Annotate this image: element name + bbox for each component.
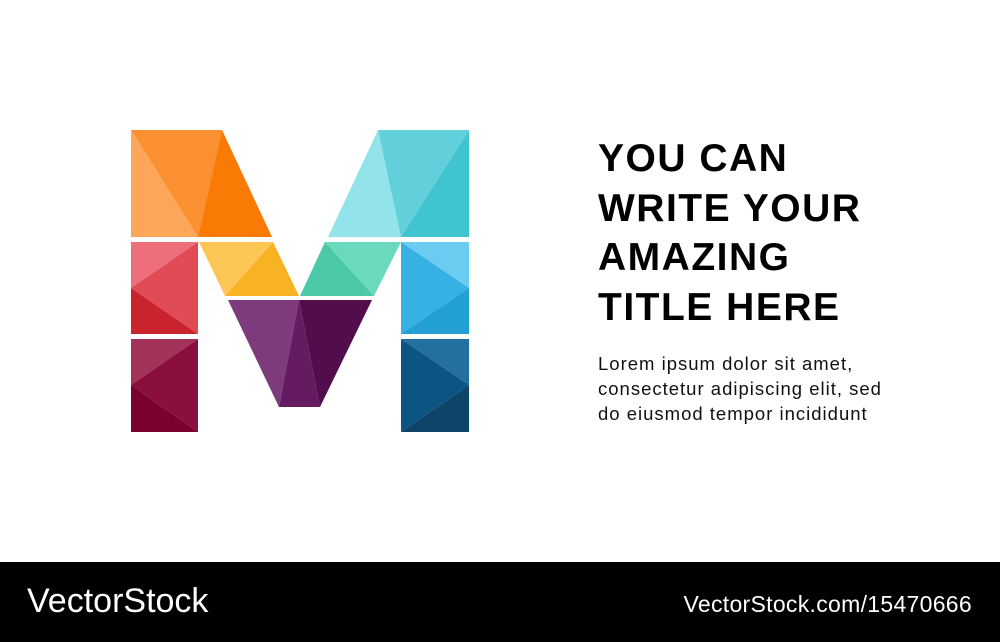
purple block bbox=[228, 300, 372, 407]
top-right cyan block bbox=[328, 130, 469, 237]
body text: consectetur adipiscing elit, sed bbox=[598, 378, 882, 399]
middle-left red block bbox=[131, 242, 198, 334]
M logo bbox=[131, 130, 469, 432]
top-left orange block bbox=[131, 130, 272, 237]
yellow block bbox=[199, 242, 299, 296]
footer band bbox=[0, 562, 1000, 642]
green block bbox=[300, 242, 401, 296]
middle-right blue block bbox=[401, 242, 469, 334]
body text: do eiusmod tempor incididunt bbox=[598, 403, 868, 424]
title: YOU CAN bbox=[598, 137, 788, 180]
url: VectorStock.com/15470666 bbox=[684, 591, 972, 617]
body text bbox=[598, 353, 882, 424]
bottom-left crimson block bbox=[131, 339, 198, 432]
body text: Lorem ipsum dolor sit amet, bbox=[598, 353, 853, 374]
title bbox=[598, 137, 861, 328]
title: TITLE HERE bbox=[598, 286, 841, 328]
bottom-right navy block bbox=[401, 339, 469, 432]
title: AMAZING bbox=[598, 236, 790, 279]
title: WRITE YOUR bbox=[598, 186, 861, 230]
brand logo text: VectorStock bbox=[27, 582, 208, 620]
